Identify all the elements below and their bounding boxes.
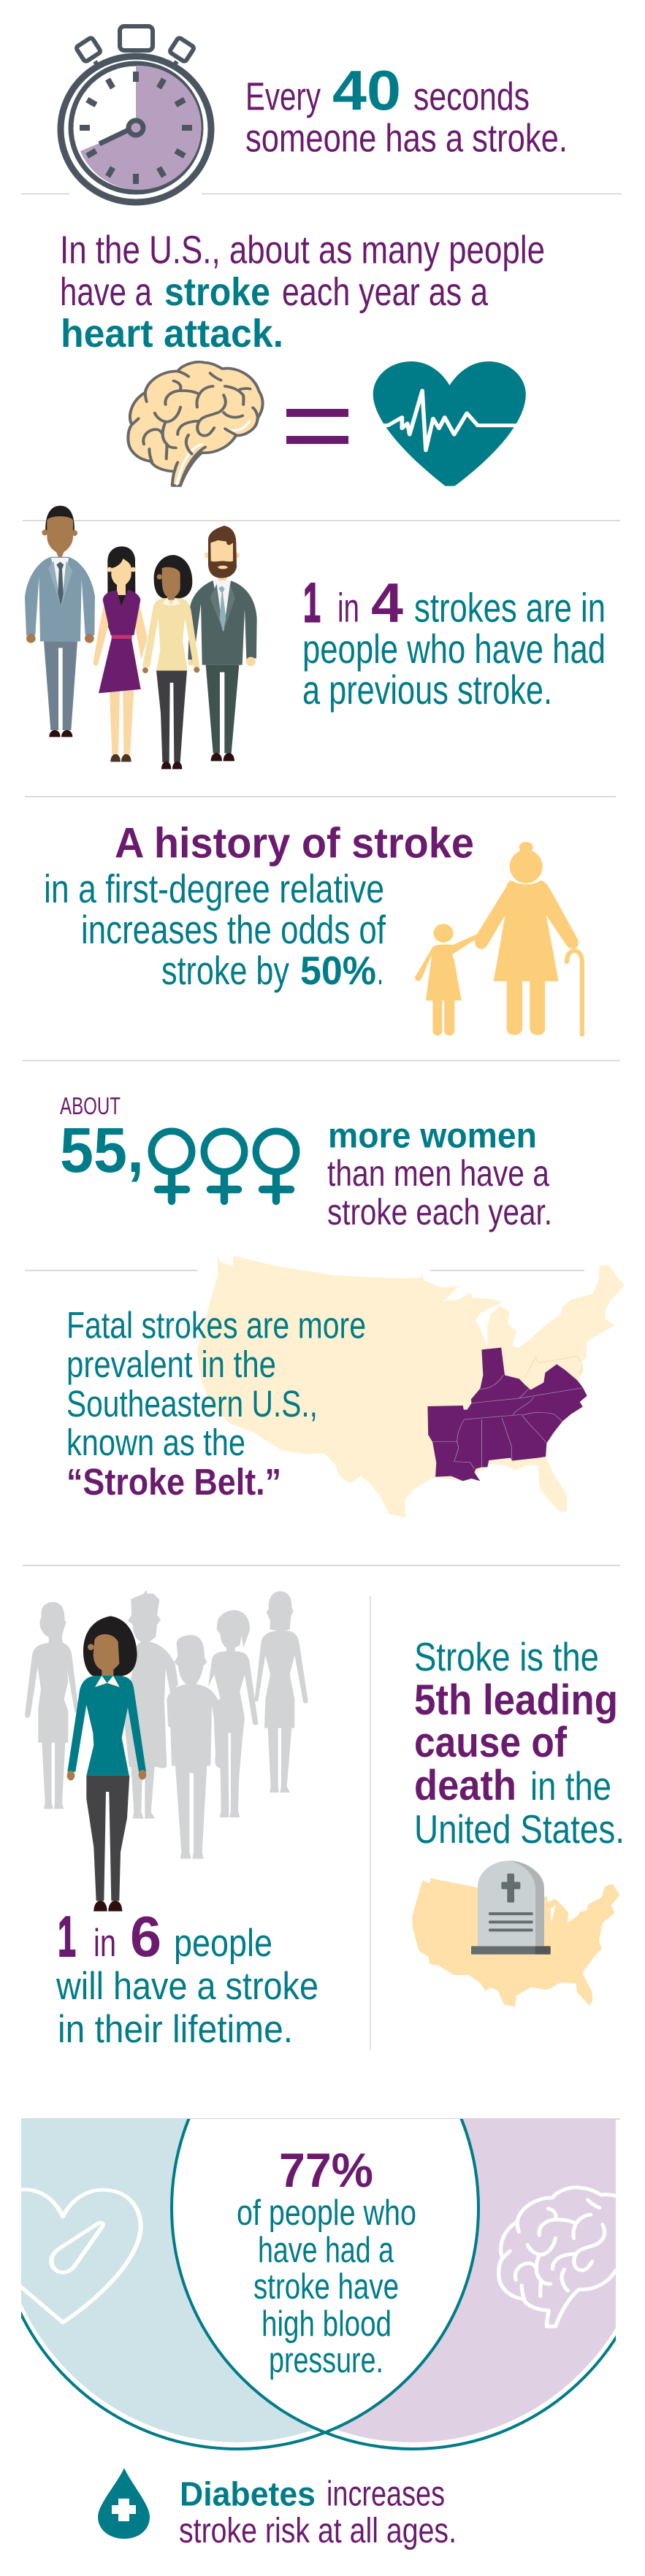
- figure: man in light suit: [25, 506, 95, 737]
- text: more women than men: [327, 1117, 552, 1233]
- text: diabetes risk: stroke risk at all ages.: [179, 2512, 457, 2550]
- text: 55,000 label: ABOUT: [60, 1092, 121, 1119]
- icon: heart with gauge: [17, 2190, 141, 2323]
- text: fatal strokes: Southeastern U.S.,: [66, 1383, 318, 1425]
- figure: woman in teal top: [67, 1616, 146, 1912]
- text: 77 percent: of people who: [237, 2193, 416, 2233]
- text: history of stroke: 50%: [300, 948, 376, 993]
- figure: woman in cream blouse: [142, 555, 199, 769]
- text: 1 in 6 people: in their lifetime.: [58, 2008, 293, 2051]
- text: more women than men: than men have a: [327, 1153, 549, 1194]
- text: every 40 seconds: 40: [332, 60, 401, 123]
- icon: heart with pulse: [373, 361, 526, 486]
- text: fatal strokes: “Stroke Belt.”: [66, 1461, 281, 1503]
- map: United States with stroke belt: [196, 1256, 625, 1517]
- text: history of stroke: increases the odds of: [81, 907, 386, 952]
- text: every 40 seconds: Every: [245, 75, 321, 119]
- text: leading cause of death: [414, 1634, 625, 1852]
- text: more women than men: stroke each year.: [327, 1192, 552, 1233]
- text: leading cause of death: in the: [530, 1763, 611, 1809]
- text: 1 in 6 people: 6: [130, 1904, 161, 1969]
- text: 1 in 4 strokes: [302, 572, 606, 713]
- text: every 40 seconds: [245, 60, 568, 161]
- text: 1 in 4 strokes: 4: [371, 572, 403, 634]
- text: 77 percent: have had a: [258, 2231, 394, 2270]
- panel: 1 in 6 people: [25, 1590, 318, 2051]
- map: US outline: [196, 1256, 625, 1517]
- panel: diabetes: [98, 2468, 457, 2550]
- icon: grandmother and child: [415, 842, 582, 1035]
- text: 77 percent: [237, 2143, 416, 2380]
- text: leading cause of death: 5th leading: [414, 1676, 618, 1724]
- panel: 5th leading cause of death: [412, 1634, 625, 2006]
- icon: white outline brain: [497, 2185, 616, 2328]
- text: 1 in 6 people: people: [174, 1922, 272, 1965]
- icon: US map with tombstone: [412, 1860, 619, 2006]
- figures: grey silhouettes: [25, 1590, 308, 1859]
- text: 1 in 6 people: [56, 1904, 318, 2051]
- text: fatal strokes: Fatal strokes are more: [66, 1305, 366, 1346]
- text: 77 percent: pressure.: [269, 2341, 383, 2380]
- illustration: woman among grey silhouettes: [25, 1590, 308, 1912]
- text: history of stroke: .: [377, 948, 383, 993]
- text: 77 percent: stroke have: [253, 2267, 399, 2307]
- figure: woman in purple dress: [93, 546, 148, 762]
- text: fatal strokes: [66, 1305, 366, 1503]
- icon: three female symbols: [151, 1131, 297, 1201]
- text: as many strokes as heart attacks: In the U.S., about as many people: [60, 228, 545, 272]
- text: diabetes risk: [179, 2475, 457, 2550]
- text: leading cause of death: death: [414, 1762, 516, 1809]
- text: 1 in 4 strokes: in: [337, 584, 359, 631]
- panel: high blood pressure venn diagram: [21, 2119, 616, 2450]
- text: history of stroke: [44, 819, 474, 993]
- text: history of stroke: A history of stroke: [115, 819, 474, 867]
- text: 55,000 label: 55,: [60, 1115, 144, 1186]
- text: as many strokes as heart attacks: [60, 228, 545, 356]
- text: every 40 seconds: someone has a stroke.: [245, 117, 568, 161]
- icon: brain: [128, 362, 263, 486]
- text: as many strokes as heart attacks: each year as a: [282, 270, 489, 314]
- text: 77 percent: high blood: [262, 2304, 392, 2344]
- text: more women than men: more women: [328, 1117, 537, 1155]
- illustration: group of four people: [25, 506, 257, 769]
- text: 77 percent: 77%: [279, 2143, 373, 2197]
- text: fatal strokes: known as the: [66, 1422, 245, 1463]
- text: 1 in 4 strokes: a previous stroke.: [302, 667, 552, 713]
- text: as many strokes as heart attacks: stroke: [164, 270, 270, 314]
- panel: every 40 seconds: [61, 26, 568, 202]
- text: history of stroke: stroke by: [161, 948, 289, 993]
- text: 1 in 4 strokes: 1: [303, 572, 321, 634]
- text: diabetes risk: increases: [327, 2475, 445, 2514]
- text: leading cause of death: Stroke is the: [414, 1634, 599, 1679]
- text: 1 in 6 people: will have a stroke: [56, 1965, 318, 2008]
- panel: stroke equals heart attack: [60, 228, 545, 486]
- text: 1 in 6 people: in: [93, 1922, 116, 1965]
- chart: venn circles: [21, 2119, 616, 2450]
- text: as many strokes as heart attacks: heart attack.: [61, 312, 283, 356]
- icon: blood drop with plus: [98, 2468, 150, 2539]
- text: fatal strokes: prevalent in the: [66, 1343, 276, 1385]
- panel: 55,000 more women: [60, 1092, 552, 1233]
- text: leading cause of death: cause of: [414, 1719, 568, 1766]
- icon: stopwatch: [61, 26, 211, 202]
- text: as many strokes as heart attacks: have a: [60, 270, 153, 314]
- map: stroke belt states: [427, 1348, 587, 1481]
- text: history of stroke: in a first-degree relative: [44, 866, 384, 911]
- panel: family history: [44, 819, 582, 1035]
- icon: equals sign: [286, 409, 348, 444]
- text: every 40 seconds: seconds: [413, 75, 530, 119]
- text: diabetes risk: Diabetes: [180, 2475, 316, 2513]
- panel: 1 in 4 strokes: [25, 506, 606, 769]
- figure: man with beard: [188, 526, 257, 761]
- panel: stroke belt: [66, 1256, 625, 1517]
- text: 1 in 6 people: 1: [58, 1904, 76, 1969]
